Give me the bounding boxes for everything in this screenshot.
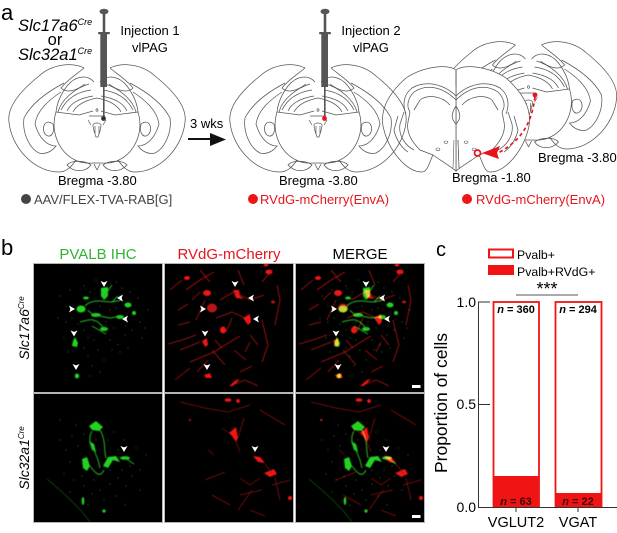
Bregma label 4: Bregma -3.80 (538, 150, 617, 165)
micrograph: merge Slc32a1 (309, 398, 423, 522)
virus legend AAV: AAV/FLEX-TVA-RAB[G] (34, 192, 172, 207)
y axis: 1.0 (457, 294, 476, 310)
y axis title: Proportion of cells (431, 333, 451, 473)
y axis (457, 294, 490, 515)
column heading PVALB: PVALB IHC (59, 246, 137, 263)
genotype label: Slc32a1 (18, 46, 78, 64)
retrograde tracing arrow (474, 93, 537, 159)
bar VGLUT2: n = 360 (497, 304, 535, 316)
panel: b (1, 235, 424, 522)
y axis: 0.5 (457, 396, 476, 412)
legend Pvalb+: Pvalb+ (517, 248, 555, 262)
x axis (478, 507, 617, 531)
row label Slc32a1: Slc32a1 (16, 439, 32, 490)
bar VGLUT2: n = 63 (500, 496, 532, 508)
genotype label (18, 17, 92, 64)
arrow: 3 weeks: 3 wks (190, 116, 224, 131)
virus legend RVdG 2: RVdG-mCherry(EnvA) (476, 192, 605, 207)
y axis: 0.0 (457, 499, 476, 515)
genotype label: or (48, 31, 63, 49)
micrograph frames (34, 264, 424, 522)
x axis: VGAT (559, 515, 597, 531)
bar VGAT: n = 22 (562, 496, 594, 508)
micrograph: mCherry Slc17a6 (168, 264, 280, 386)
micrograph: merge Slc17a6 (299, 264, 420, 388)
legend Pvalb+ (489, 248, 555, 262)
injection 1 label: vlPAG (132, 40, 168, 55)
panel label a: a (1, 0, 14, 25)
brain section 2 (230, 65, 406, 172)
syringe 2 (319, 9, 331, 121)
column heading RVdG: RVdG-mCherry (177, 246, 281, 263)
arrow: 3 weeks (188, 116, 226, 146)
Bregma label 2: Bregma -3.80 (279, 173, 358, 188)
panel label c: c (436, 239, 446, 261)
row label Slc17a6: Slc17a6 (16, 309, 32, 360)
genotype label: Cre (78, 46, 92, 56)
brain section 1 (9, 65, 185, 172)
panel: c (431, 239, 617, 531)
panel label b: b (1, 235, 13, 260)
virus legend RVdG 1: RVdG-mCherry(EnvA) (260, 192, 389, 207)
row label Slc17a6: Cre (17, 296, 26, 309)
legend Pvalb+RVdG+: Pvalb+RVdG+ (517, 265, 595, 279)
Bregma label 1: Bregma -3.80 (58, 173, 137, 188)
x axis: VGLUT2 (488, 515, 544, 531)
column heading MERGE: MERGE (332, 246, 388, 263)
genotype label: Slc17a6 (18, 17, 78, 35)
brain section 3 behind (440, 42, 617, 149)
bar VGAT: n = 294 (559, 304, 598, 316)
panel: a (1, 0, 617, 207)
genotype label: Cre (78, 17, 92, 27)
micrograph: PVALB Slc17a6 (58, 280, 148, 378)
bar VGAT (555, 302, 602, 508)
micrograph: PVALB Slc32a1 (47, 420, 146, 522)
Bregma label 3: Bregma -1.80 (452, 170, 531, 185)
significance bar: *** (536, 279, 558, 299)
injection 2 label: vlPAG (353, 40, 389, 55)
syringe 1 (98, 9, 110, 121)
injection 1 label: Injection 1 (120, 23, 180, 38)
bar VGLUT2 (493, 302, 540, 508)
injection 2 label: Injection 2 (341, 23, 401, 38)
significance bar (516, 279, 578, 299)
micrograph: mCherry Slc32a1 (180, 398, 292, 516)
row label Slc32a1: Cre (17, 426, 26, 439)
brain section Bregma -1.80 (382, 67, 530, 172)
